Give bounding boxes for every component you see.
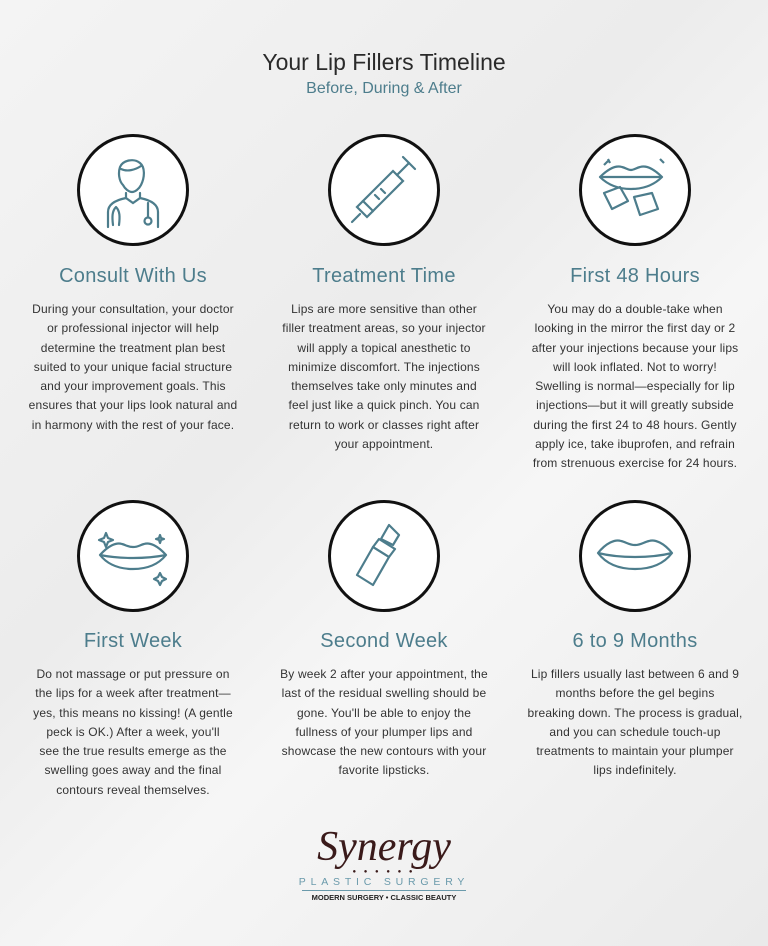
text: 6 to 9 months: breaking down. The process is gradual, [528,706,742,720]
text: consult: and your improvement goals. This [40,379,226,393]
logo: ● ● ● ● ● ● [352,869,416,875]
heading: treatment: Treatment Time [312,265,456,287]
text: treatment: return to work or classes right after [289,418,479,432]
heading: second week: Second Week [320,630,448,652]
text: consult [29,302,237,432]
text: 6 to 9 months: Lip fillers usually last between 6 and 9 [531,667,739,681]
icon: lips with ice [579,134,691,246]
text: 48 hours: will look inflated. Not to worry! [553,360,717,374]
text: first week [33,667,233,797]
heading: 48 hours: First 48 Hours [570,265,700,287]
text: 48 hours: apply ice, take ibuprofen, and refrain [535,437,735,451]
text: treatment [282,302,486,451]
text: 6 to 9 months: months before the gel begins [556,686,714,700]
text: 48 hours: after your injections because your lips [532,341,738,355]
text: first week: contours reveal themselves. [56,783,210,797]
text: 6 to 9 months: lips indefinitely. [593,763,677,777]
text: 6 to 9 months: and you can schedule touch-up [549,725,721,739]
icon: doctor [77,134,189,246]
icon: syringe [328,134,440,246]
text: treatment: minimize discomfort. The injections [288,360,480,374]
text: 6 to 9 months: treatments to maintain your plumper [536,744,734,758]
text: 48 hours: from strenuous exercise for 24 hours. [533,456,737,470]
text: consult: determine the treatment plan best [41,341,225,355]
text: 48 hours: injections—but it will greatly subside [536,398,734,412]
text: first week: yes, this means no kissing! (A gentle [33,706,233,720]
text: treatment: your appointment. [335,437,433,451]
text: 48 hours: Swelling is normal—especially for lip [535,379,735,393]
text: first week: the lips for a week after treatment— [35,686,231,700]
text: second week: favorite lipsticks. [339,763,429,777]
text: second week: gone. You'll be able to enjoy the [297,706,471,720]
logo: PLASTIC SURGERY [299,876,469,888]
text: treatment: will apply a topical anesthetic to [297,341,471,355]
icon: sparkle lips [77,500,189,612]
text: second week [280,667,488,777]
logo: MODERN SURGERY • CLASSIC BEAUTY [312,893,456,902]
logo [299,824,469,902]
text: treatment: feel just like a quick pinch. You can [288,398,480,412]
text: first week: swelling goes away and the final [45,763,221,777]
heading: consult: Consult With Us [59,265,207,287]
text: 48 hours: looking in the mirror the first day or 2 [535,321,735,335]
icon: lips [579,500,691,612]
text: consult: suited to your unique facial structure [34,360,232,374]
text: 48 hours [532,302,738,470]
subtitle: Before, During & After [306,80,462,97]
text: treatment: themselves take only minutes and [291,379,477,393]
text: consult: or professional injector will help [47,321,219,335]
heading: first week: First Week [84,630,182,652]
icon: lipstick [328,500,440,612]
text: 48 hours: during the first 24 to 48 hours. Gently [533,418,737,432]
text: 48 hours: You may do a double-take when [547,302,723,316]
text: second week: fullness of your plumper lips and [295,725,473,739]
text: first week: peck is OK.) After a week, you'll [46,725,220,739]
text: second week: showcase the new contours with your [282,744,486,758]
text: second week: By week 2 after your appointment, the [280,667,488,681]
text: first week: Do not massage or put pressure on [36,667,230,681]
text: consult: in harmony with the rest of your face. [32,418,234,432]
heading: 6 to 9 months: 6 to 9 Months [572,630,698,652]
text: first week: see the true results emerge as the [39,744,227,758]
text: second week: last of the residual swelling should be [282,686,486,700]
logo: Synergy [317,824,451,870]
text: treatment: Lips are more sensitive than other [291,302,477,316]
title: Your Lip Fillers Timeline [262,49,506,75]
text: treatment: filler treatment areas, so your injector [282,321,486,335]
text: 6 to 9 months [528,667,742,777]
text: consult: ensures that your lips look natural and [29,398,237,412]
text: consult: During your consultation, your doctor [32,302,234,316]
